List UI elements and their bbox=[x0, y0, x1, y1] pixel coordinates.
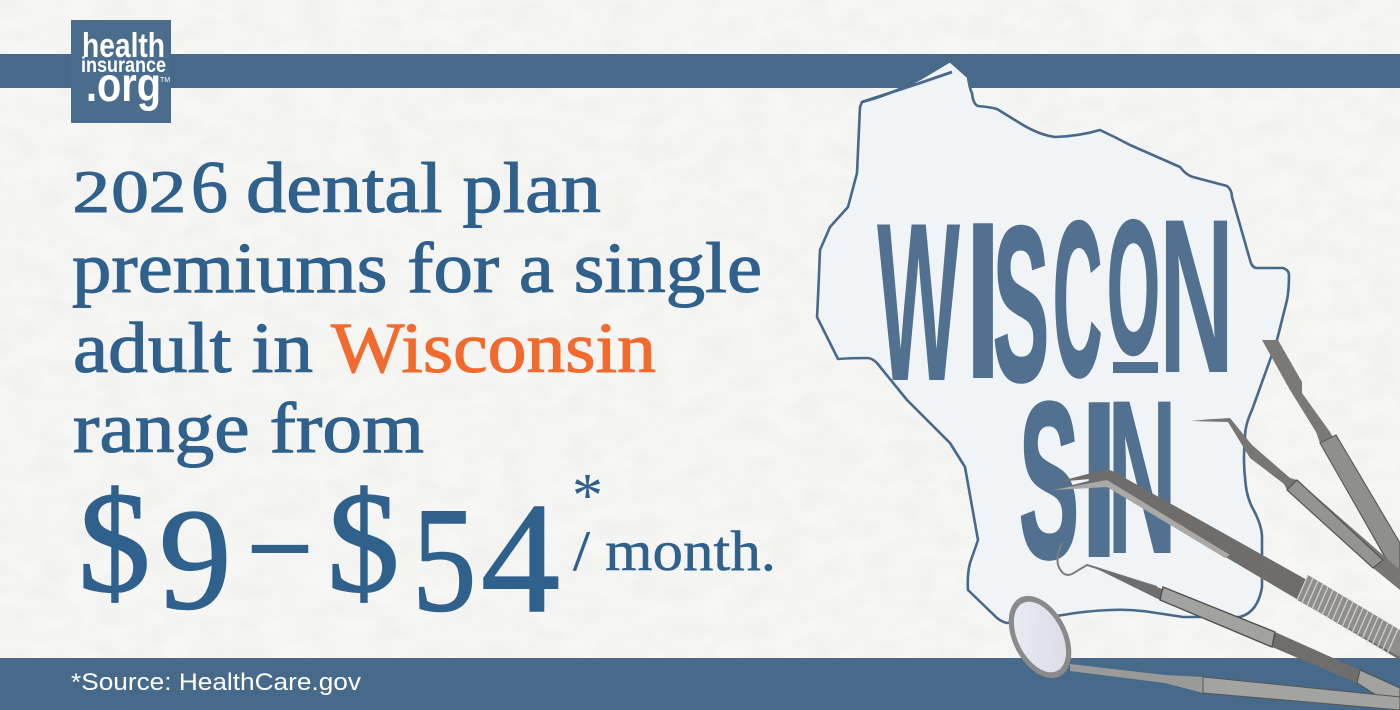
outline inner stroke near the northern tip bbox=[862, 72, 952, 102]
state name lettering: WISCONSIN: N bbox=[1159, 174, 1234, 419]
per month label: / month. bbox=[573, 520, 776, 583]
dental tool: spatula bbox=[1262, 340, 1400, 585]
logo: healthinsurance.org: .org bbox=[86, 59, 161, 112]
logo: healthinsurance.org: insurance bbox=[81, 54, 166, 77]
headline text bbox=[72, 147, 762, 468]
bottom banner bar bbox=[0, 658, 1400, 710]
Wisconsin state outline bbox=[817, 61, 1289, 623]
state name lettering: WISCONSIN: I bbox=[964, 175, 1002, 426]
state name lettering: WISCONSIN: I bbox=[1079, 355, 1119, 606]
state name lettering: WISCONSIN: O bbox=[1107, 183, 1160, 394]
price range figure: 4 bbox=[481, 471, 560, 646]
dental tool: hooked probe bbox=[1058, 543, 1400, 710]
headline text: premiums for a single bbox=[72, 228, 762, 308]
dental tool: mouth mirror bbox=[996, 586, 1400, 710]
source note: *Source: HealthCare.gov bbox=[71, 669, 361, 696]
price range figure: – bbox=[253, 481, 307, 596]
headline text: 6 bbox=[191, 147, 228, 229]
headline text: Wisconsin bbox=[331, 308, 656, 388]
headline text: 0 bbox=[111, 158, 149, 225]
price range figure bbox=[78, 463, 560, 646]
state name lettering: WISCONSIN: S bbox=[1019, 356, 1079, 604]
price range figure: 5 bbox=[412, 477, 476, 643]
logo: healthinsurance.org: health bbox=[82, 27, 165, 65]
price range figure: 9 bbox=[159, 480, 232, 640]
logo: healthinsurance.org bbox=[71, 20, 171, 123]
state name lettering: WISCONSIN bbox=[877, 174, 1234, 606]
headline text: adult in bbox=[73, 308, 313, 388]
headline text: dental plan bbox=[246, 148, 601, 228]
state name lettering: WISCONSIN: N bbox=[1107, 355, 1177, 601]
logo: healthinsurance.org: TM bbox=[160, 77, 170, 84]
price range figure: $ bbox=[78, 463, 150, 623]
headline text: 2 bbox=[72, 158, 110, 225]
state name lettering: WISCONSIN: C bbox=[1053, 176, 1102, 422]
state name lettering: WISCONSIN: S bbox=[993, 182, 1049, 428]
headline text: range from bbox=[73, 388, 424, 468]
asterisk: * bbox=[572, 462, 603, 530]
top banner bar bbox=[0, 54, 1400, 88]
price range figure: $ bbox=[327, 463, 400, 623]
dental tool: tweezers bbox=[1053, 470, 1400, 660]
headline text: 2 bbox=[149, 158, 186, 225]
state name lettering: WISCONSIN: W bbox=[877, 177, 960, 429]
dental tool: curved explorer bbox=[1191, 418, 1400, 590]
